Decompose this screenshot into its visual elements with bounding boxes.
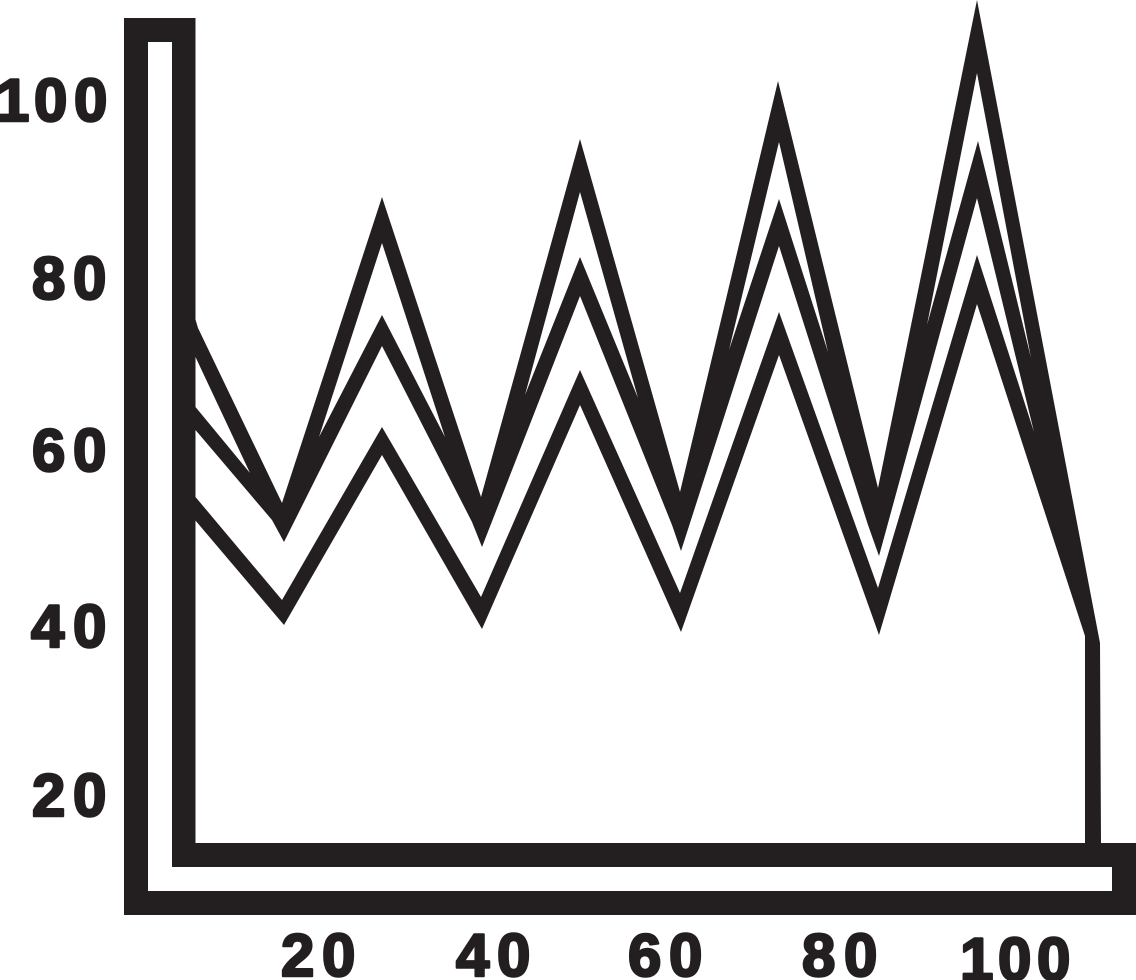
gaps between top and middle series <box>196 73 1031 473</box>
gap between middle and lower series <box>196 198 1034 600</box>
y label 80: 80 <box>32 245 106 312</box>
y label 60: 60 <box>32 417 106 484</box>
x-axis labels <box>281 922 1070 980</box>
y label 40: 40 <box>31 593 106 660</box>
series silhouette <box>195 0 1101 843</box>
y-axis labels <box>0 67 107 829</box>
y label 20: 20 <box>32 762 106 829</box>
zigzag data series <box>195 0 1101 843</box>
